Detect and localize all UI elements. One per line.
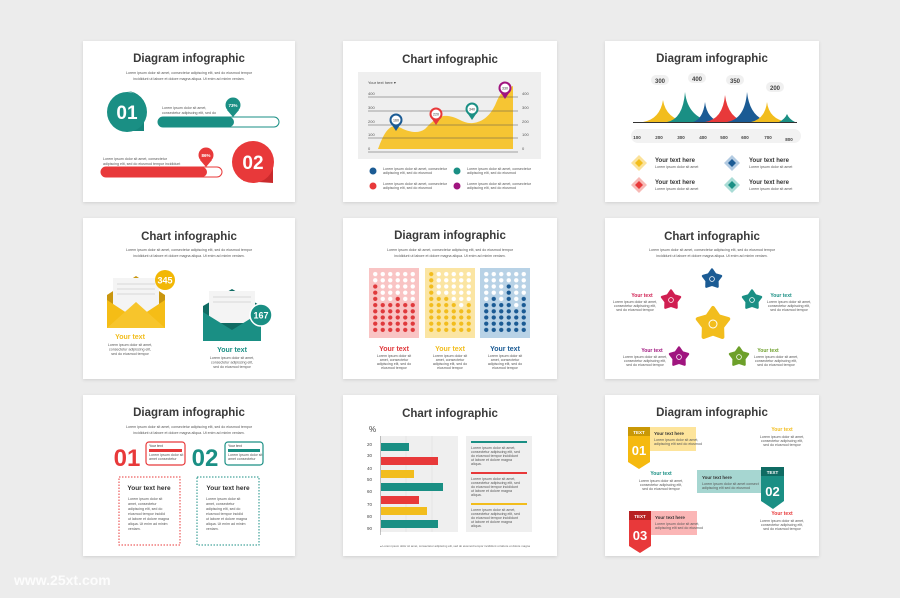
dotted box teal: Your text here bbox=[206, 485, 250, 492]
bar chart: 40 bbox=[367, 466, 373, 471]
pins bbox=[390, 82, 512, 131]
chart panel bbox=[358, 72, 541, 159]
caption top right: Your text bbox=[771, 427, 793, 433]
dotted box red: amet, consectetur bbox=[128, 502, 157, 506]
notes panel: ut labore et dolore magna bbox=[471, 458, 512, 462]
notes panel bbox=[466, 436, 532, 532]
chart panel: 0 bbox=[522, 146, 525, 151]
tag 02: 02 bbox=[765, 484, 780, 499]
dotted box red: veniam. bbox=[128, 527, 141, 531]
intro text: incididunt ut labore et dolore magna aliqua. Ut enim ad minim veniam. bbox=[133, 77, 245, 81]
legend: Your text here bbox=[749, 180, 790, 186]
stars bbox=[662, 270, 761, 365]
title: Diagram infographic bbox=[133, 53, 246, 65]
notes panel: consectetur adipiscing elit, sed bbox=[471, 450, 520, 454]
caption middle left: consectetur adipiscing elit, bbox=[640, 483, 682, 487]
dotted box teal: Lorem ipsum dolor sit bbox=[206, 497, 240, 501]
notes panel: aliqua. bbox=[471, 493, 482, 497]
bar chart: 70 bbox=[367, 502, 373, 507]
caption top right bbox=[760, 427, 804, 447]
intro text: incididunt ut labore et dolore magna aliqua. Ut enim ad minim veniam. bbox=[133, 254, 245, 258]
tag 01: Your text here bbox=[654, 431, 684, 436]
dotted box red: Your text here bbox=[127, 485, 171, 492]
legend bbox=[631, 155, 792, 193]
star captions: Lorem ipsum dolor sit amet, bbox=[767, 300, 811, 304]
title: Chart infographic bbox=[402, 408, 499, 420]
footnote: ● Lorem ipsum dolor sit amet, consectetur adipiscing elit, sed do eiusmod tempor incididunt ut labore et dolore magna bbox=[380, 544, 531, 548]
dotted box teal: amet, consectetur bbox=[206, 502, 235, 506]
legend: adipiscing elit, sed do eiusmod bbox=[467, 171, 516, 175]
notes panel: consectetur adipiscing elit, sed bbox=[471, 512, 520, 516]
notes panel: ut labore et dolore magna bbox=[471, 489, 512, 493]
slide 3: peaks diagram bbox=[605, 41, 819, 202]
item 02: amet consectetur bbox=[228, 457, 256, 461]
tag 01: Lorem ipsum dolor sit amet, bbox=[654, 438, 698, 442]
dotted box teal: veniam. bbox=[206, 527, 219, 531]
star captions: Lorem ipsum dolor sit amet, bbox=[754, 355, 798, 359]
blue dot panel bbox=[480, 268, 530, 338]
intro text: incididunt ut labore et dolore magna aliqua. Ut enim ad minim veniam. bbox=[394, 254, 506, 258]
caption middle left: Your text bbox=[650, 471, 672, 477]
chart panel: 200 bbox=[522, 119, 529, 124]
chart panel: 200 bbox=[368, 119, 375, 124]
chart panel: Your text here ▾ bbox=[368, 80, 396, 85]
captions: amet, consectetur bbox=[436, 358, 465, 362]
caption bottom right bbox=[760, 511, 804, 531]
caption bottom right: sed do eiusmod tempor bbox=[763, 527, 802, 531]
item 02: Your text bbox=[228, 444, 242, 448]
dotted box teal: aliqua. Ut enim ad minim bbox=[206, 522, 246, 526]
chart panel: 100 bbox=[368, 132, 375, 137]
title: Chart infographic bbox=[402, 54, 499, 66]
captions: amet, consectetur bbox=[491, 358, 520, 362]
tag 02: Lorem ipsum dolor sit amet consect bbox=[702, 482, 759, 486]
captions: amet, consectetur bbox=[380, 358, 409, 362]
caption middle left: Lorem ipsum dolor sit amet, bbox=[639, 479, 683, 483]
captions: Your text bbox=[379, 346, 410, 353]
yellow envelope: 345 bbox=[157, 276, 173, 286]
star captions: consectetur adipiscing elit, bbox=[614, 304, 656, 308]
captions: adipiscing elit, sed do bbox=[488, 362, 522, 366]
axis labels: 500 bbox=[720, 135, 728, 140]
slide 8: bar chart bbox=[343, 395, 557, 556]
item 01: 01 bbox=[114, 445, 140, 472]
slide 7: numbered boxes bbox=[83, 395, 295, 556]
notes panel: aliqua. bbox=[471, 524, 482, 528]
badge 01 bbox=[107, 91, 147, 132]
chart panel: 300 bbox=[368, 105, 375, 110]
tag 03: TEXT bbox=[634, 514, 646, 519]
caption top right: consectetur adipiscing elit, bbox=[761, 439, 803, 443]
bar chart: 20 bbox=[367, 442, 373, 447]
red dot panel bbox=[369, 268, 419, 338]
yellow envelope bbox=[107, 270, 175, 328]
star captions: Your text bbox=[770, 293, 792, 299]
title: Diagram infographic bbox=[656, 53, 769, 65]
axis labels: 800 bbox=[785, 137, 793, 142]
intro text: Lorem ipsum dolor sit amet, consectetur adipiscing elit, sed do eiusmod tempor bbox=[126, 248, 253, 252]
peaks chart bbox=[633, 92, 797, 122]
teal caption: Your text bbox=[217, 347, 248, 354]
red progress bar: adipiscing elit, sed do eiusmod tempor incididunt bbox=[103, 162, 180, 166]
intro text bbox=[126, 248, 253, 258]
chart panel: 400 bbox=[368, 91, 375, 96]
captions: Lorem ipsum dolor sit bbox=[488, 354, 522, 358]
intro text: Lorem ipsum dolor sit amet, consectetur adipiscing elit, sed do eiusmod tempor bbox=[649, 248, 776, 252]
star captions: sed do eiusmod tempor bbox=[770, 308, 809, 312]
dotted box red: adipiscing elit, sed do bbox=[128, 507, 162, 511]
axis labels: 100 bbox=[633, 135, 641, 140]
teal progress bar bbox=[158, 98, 279, 127]
star captions: consectetur adipiscing elit, bbox=[768, 304, 810, 308]
notes panel: Lorem ipsum dolor sit amet, bbox=[471, 508, 515, 512]
title: Chart infographic bbox=[141, 231, 238, 243]
captions: adipiscing elit, sed do bbox=[377, 362, 411, 366]
axis labels: 600 bbox=[741, 135, 749, 140]
notes panel: Lorem ipsum dolor sit amet, bbox=[471, 477, 515, 481]
title: Diagram infographic bbox=[394, 230, 507, 242]
teal caption: Lorem ipsum dolor sit amet, bbox=[210, 356, 254, 360]
legend: Lorem ipsum dolor sit amet bbox=[749, 187, 792, 191]
value pills bbox=[651, 73, 784, 92]
badge 01: 01 bbox=[116, 103, 138, 124]
tag 03: Your text here bbox=[655, 515, 685, 520]
slide 1: diagram progress bbox=[83, 41, 295, 202]
legend: Your text here bbox=[655, 158, 696, 164]
legend: adipiscing elit, sed do eiusmod bbox=[383, 171, 432, 175]
axis labels: 200 bbox=[655, 135, 663, 140]
yellow caption: Lorem ipsum dolor sit amet, bbox=[108, 343, 152, 347]
tag 03: 03 bbox=[633, 528, 647, 543]
title: Chart infographic bbox=[664, 231, 761, 243]
star captions: sed do eiusmod tempor bbox=[626, 363, 665, 367]
caption middle left: sed do eiusmod tempor bbox=[642, 487, 681, 491]
teal envelope bbox=[203, 289, 272, 341]
teal progress bar: 73% bbox=[228, 103, 238, 108]
tag 01: adipiscing elit sed do eiusmod bbox=[654, 442, 702, 446]
title: Diagram infographic bbox=[656, 407, 769, 419]
intro text: incididunt ut labore et dolore magna aliqua. Ut enim ad minim veniam. bbox=[656, 254, 768, 258]
dotted box teal: eiusmod tempor incidid bbox=[206, 512, 243, 516]
dotted box red bbox=[119, 477, 180, 545]
axis labels: 700 bbox=[764, 135, 772, 140]
notes panel: aliqua. bbox=[471, 462, 482, 466]
intro text: Lorem ipsum dolor sit amet, consectetur adipiscing elit, sed do eiusmod tempor bbox=[387, 248, 514, 252]
yellow caption: sed do eiusmod tempor bbox=[111, 352, 150, 356]
teal caption bbox=[210, 347, 254, 369]
chart panel: 0 bbox=[368, 146, 371, 151]
yellow caption: consectetur adipiscing elit, bbox=[109, 348, 151, 352]
tag 02: adipiscing elit sed do eiusmod bbox=[702, 486, 750, 490]
captions: eiusmod tempor bbox=[381, 366, 408, 370]
teal progress bar: consectetur adipiscing elit, sed do bbox=[162, 111, 216, 115]
legend: Your text here bbox=[749, 158, 790, 164]
caption top right: sed do eiusmod tempor bbox=[763, 443, 802, 447]
star captions: consectetur adipiscing elit, bbox=[624, 359, 666, 363]
legend: Lorem ipsum dolor sit amet bbox=[655, 187, 698, 191]
intro text bbox=[126, 425, 253, 435]
star captions: sed do eiusmod tempor bbox=[616, 308, 655, 312]
notes panel: do eiusmod tempor incididunt bbox=[471, 485, 518, 489]
captions: Lorem ipsum dolor sit bbox=[433, 354, 467, 358]
notes panel: do eiusmod tempor incididunt bbox=[471, 454, 518, 458]
red progress bar bbox=[101, 148, 222, 177]
bar chart: 50 bbox=[367, 477, 373, 482]
star captions bbox=[613, 293, 811, 367]
captions: eiusmod tempor bbox=[492, 366, 519, 370]
tag 03: Lorem ipsum dolor sit amet, bbox=[655, 522, 699, 526]
caption bottom right: consectetur adipiscing elit, bbox=[761, 523, 803, 527]
bar chart: 90 bbox=[367, 526, 373, 531]
intro text bbox=[649, 248, 776, 258]
slide 4: envelopes bbox=[83, 218, 295, 379]
yellow caption bbox=[108, 334, 152, 356]
tag 03: adipiscing elit sed do eiusmod bbox=[655, 526, 703, 530]
legend: Your text here bbox=[655, 180, 696, 186]
dotted box red: ut labore et dolore magna bbox=[128, 517, 169, 521]
slide 2: area chart bbox=[343, 41, 557, 202]
badge 02: 02 bbox=[242, 153, 264, 174]
bar chart: 30 bbox=[367, 453, 373, 458]
teal envelope: 167 bbox=[253, 310, 269, 320]
legend: Lorem ipsum dolor sit amet bbox=[655, 165, 698, 169]
star captions: Your text bbox=[757, 348, 779, 354]
legend: Lorem ipsum dolor sit amet, consectetur bbox=[467, 182, 532, 186]
chart panel: 300 bbox=[522, 105, 529, 110]
teal progress bar: Lorem ipsum dolor sit amet, bbox=[162, 106, 206, 110]
dotted box teal: ut labore et dolore magna bbox=[206, 517, 247, 521]
teal caption: sed do eiusmod tempor bbox=[213, 365, 252, 369]
tag 01: TEXT bbox=[633, 430, 645, 435]
legend: Lorem ipsum dolor sit amet bbox=[749, 165, 792, 169]
notes panel: do eiusmod tempor incididunt bbox=[471, 516, 518, 520]
pins: 340 bbox=[469, 108, 475, 112]
intro text: Lorem ipsum dolor sit amet, consectetur adipiscing elit, sed do eiusmod tempor bbox=[126, 71, 253, 75]
tag 03 bbox=[629, 511, 703, 553]
star captions: Your text bbox=[631, 293, 653, 299]
value pills: 300 bbox=[655, 79, 666, 85]
tag 01 bbox=[628, 427, 702, 469]
red progress bar: Lorem ipsum dolor sit amet, consectetur bbox=[103, 157, 168, 161]
axis labels: 300 bbox=[677, 135, 685, 140]
item 01 bbox=[114, 442, 185, 472]
pins: 330 bbox=[502, 86, 508, 90]
legend: Lorem ipsum dolor sit amet, consectetur bbox=[383, 167, 448, 171]
value pills: 350 bbox=[730, 79, 741, 85]
captions: eiusmod tempor bbox=[437, 366, 464, 370]
pins: 220 bbox=[433, 112, 439, 116]
star captions: Lorem ipsum dolor sit amet, bbox=[623, 355, 667, 359]
slide 5: dot panels bbox=[343, 218, 557, 379]
value pills: 400 bbox=[692, 77, 703, 83]
legend: Lorem ipsum dolor sit amet, consectetur bbox=[383, 182, 448, 186]
dotted box red: eiusmod tempor incidid bbox=[128, 512, 165, 516]
value pills: 200 bbox=[770, 86, 781, 92]
bar chart: 60 bbox=[367, 489, 373, 494]
star captions: Your text bbox=[641, 348, 663, 354]
star captions: sed do eiusmod tempor bbox=[757, 363, 796, 367]
intro text bbox=[126, 71, 253, 81]
notes panel: Lorem ipsum dolor sit amet, bbox=[471, 446, 515, 450]
notes panel: ut labore et dolore magna bbox=[471, 520, 512, 524]
notes panel: consectetur adipiscing elit, sed bbox=[471, 481, 520, 485]
caption bottom right: Your text bbox=[771, 511, 793, 517]
legend: Lorem ipsum dolor sit amet, consectetur bbox=[467, 167, 532, 171]
slide 9: tag diagram bbox=[605, 395, 819, 556]
item 02 bbox=[192, 442, 263, 472]
star captions: consectetur adipiscing elit, bbox=[755, 359, 797, 363]
intro text: Lorem ipsum dolor sit amet, consectetur adipiscing elit, sed do eiusmod tempor bbox=[126, 425, 253, 429]
red progress bar: 86% bbox=[201, 153, 211, 158]
captions: Your text bbox=[490, 346, 521, 353]
star captions: Lorem ipsum dolor sit amet, bbox=[613, 300, 657, 304]
dotted box teal: adipiscing elit, sed do bbox=[206, 507, 240, 511]
intro text bbox=[387, 248, 514, 258]
watermark: www.25xt.com bbox=[13, 572, 111, 588]
item 02: 02 bbox=[192, 445, 218, 472]
item 01: Your text bbox=[149, 444, 163, 448]
tag 02: TEXT bbox=[767, 470, 778, 475]
captions: adipiscing elit, sed do bbox=[433, 362, 467, 366]
chart panel: 400 bbox=[522, 91, 529, 96]
axis labels bbox=[631, 129, 801, 143]
item 01: amet consectetur bbox=[149, 457, 177, 461]
caption middle left bbox=[639, 471, 683, 491]
badge 02 bbox=[232, 141, 274, 183]
tag 02 bbox=[697, 467, 784, 509]
dotted box red: aliqua. Ut enim ad minim bbox=[128, 522, 168, 526]
axis labels: 400 bbox=[699, 135, 707, 140]
caption bottom right: Lorem ipsum dolor sit amet, bbox=[760, 519, 804, 523]
tag 02: Your text here bbox=[702, 475, 732, 480]
title: Diagram infographic bbox=[133, 407, 246, 419]
legend: adipiscing elit, sed do eiusmod bbox=[467, 186, 516, 190]
bar chart: 80 bbox=[367, 514, 373, 519]
intro text: incididunt ut labore et dolore magna aliqua. Ut enim ad minim veniam. bbox=[133, 431, 245, 435]
dotted box red: Lorem ipsum dolor sit bbox=[128, 497, 162, 501]
captions: Lorem ipsum dolor sit bbox=[377, 354, 411, 358]
caption top right: Lorem ipsum dolor sit amet, bbox=[760, 435, 804, 439]
slide 6: stars bbox=[605, 218, 819, 379]
teal caption: consectetur adipiscing elit, bbox=[211, 360, 253, 364]
bar chart: % bbox=[369, 425, 376, 434]
pins: 160 bbox=[393, 118, 399, 122]
bar chart bbox=[367, 425, 458, 535]
legend bbox=[370, 167, 532, 190]
item 01: Lorem ipsum dolor sit bbox=[149, 453, 183, 457]
item 02: Lorem ipsum dolor sit bbox=[228, 453, 262, 457]
captions: Your text bbox=[435, 346, 466, 353]
yellow dot panel bbox=[425, 268, 475, 338]
chart panel: 100 bbox=[522, 132, 529, 137]
captions bbox=[377, 346, 522, 370]
yellow caption: Your text bbox=[115, 334, 146, 341]
dotted box teal bbox=[197, 477, 259, 545]
tag 01: 01 bbox=[632, 443, 646, 458]
legend: adipiscing elit, sed do eiusmod bbox=[383, 186, 432, 190]
